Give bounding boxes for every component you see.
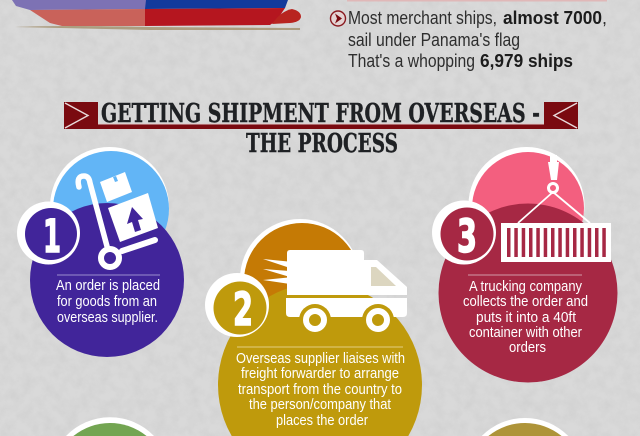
number badge 1: 1 bbox=[43, 210, 61, 263]
panel: step 2 bbox=[205, 219, 422, 436]
text: step 3 description: A trucking company bbox=[469, 279, 583, 295]
text: step 3 description: collects the order and bbox=[463, 294, 588, 310]
text: step 3 description: container with other bbox=[469, 325, 582, 341]
text block: Panama flag fact: 6,979 ships bbox=[480, 51, 573, 71]
number badge 1 bbox=[17, 202, 80, 264]
text: step 1 description: An order is placed bbox=[56, 278, 160, 294]
text: step 3 description: orders bbox=[509, 340, 546, 356]
decorative pink strip above fact bbox=[347, 0, 607, 2]
icon: bullet arrow bbox=[330, 11, 346, 26]
title: THE PROCESS bbox=[246, 129, 398, 159]
number badge 2 bbox=[205, 273, 269, 337]
text: step 2 description bbox=[236, 351, 405, 429]
text block: Panama flag fact bbox=[348, 8, 607, 71]
text block: Panama flag fact: almost 7000 bbox=[503, 8, 602, 28]
panel: step 1 bbox=[17, 147, 184, 357]
heading banner ribbon bbox=[64, 102, 578, 129]
icon: hand truck with boxes bbox=[78, 172, 158, 267]
number badge 3 bbox=[432, 200, 496, 264]
panel: step 3 bbox=[432, 147, 618, 382]
text block: Panama flag fact: That's a whopping bbox=[348, 51, 475, 71]
text: step 3 description bbox=[463, 279, 588, 356]
panel: step 4 circle (cropped) bbox=[66, 417, 154, 436]
text block: Panama flag fact: , bbox=[602, 8, 607, 28]
icon: crane hook and container bbox=[501, 155, 611, 262]
text block: Panama flag fact: sail under Panama's flag bbox=[348, 30, 520, 50]
text block: Panama flag fact: Most merchant ships, bbox=[348, 8, 497, 28]
panel: step 5 circle (cropped) bbox=[482, 418, 568, 436]
illustration: cargo ship hull bbox=[12, 0, 301, 30]
text: step 2 description: Overseas supplier liaises with bbox=[236, 351, 405, 367]
text: step 1 description: overseas supplier. bbox=[57, 310, 158, 326]
text: step 2 description: places the order bbox=[276, 413, 368, 429]
title bbox=[101, 99, 540, 159]
text: step 1 description: for goods from an bbox=[57, 294, 157, 310]
number badge 3: 3 bbox=[457, 210, 477, 263]
text: step 3 description: puts it into a 40ft bbox=[476, 310, 576, 326]
text: step 2 description: freight forwarder to arrange bbox=[241, 366, 399, 382]
text: step 1 description bbox=[56, 278, 160, 326]
number badge 2: 2 bbox=[233, 283, 253, 336]
text: step 2 description: the person/company that bbox=[249, 397, 391, 413]
text: step 2 description: transport from the country to bbox=[238, 382, 402, 398]
icon: delivery truck bbox=[263, 250, 407, 336]
